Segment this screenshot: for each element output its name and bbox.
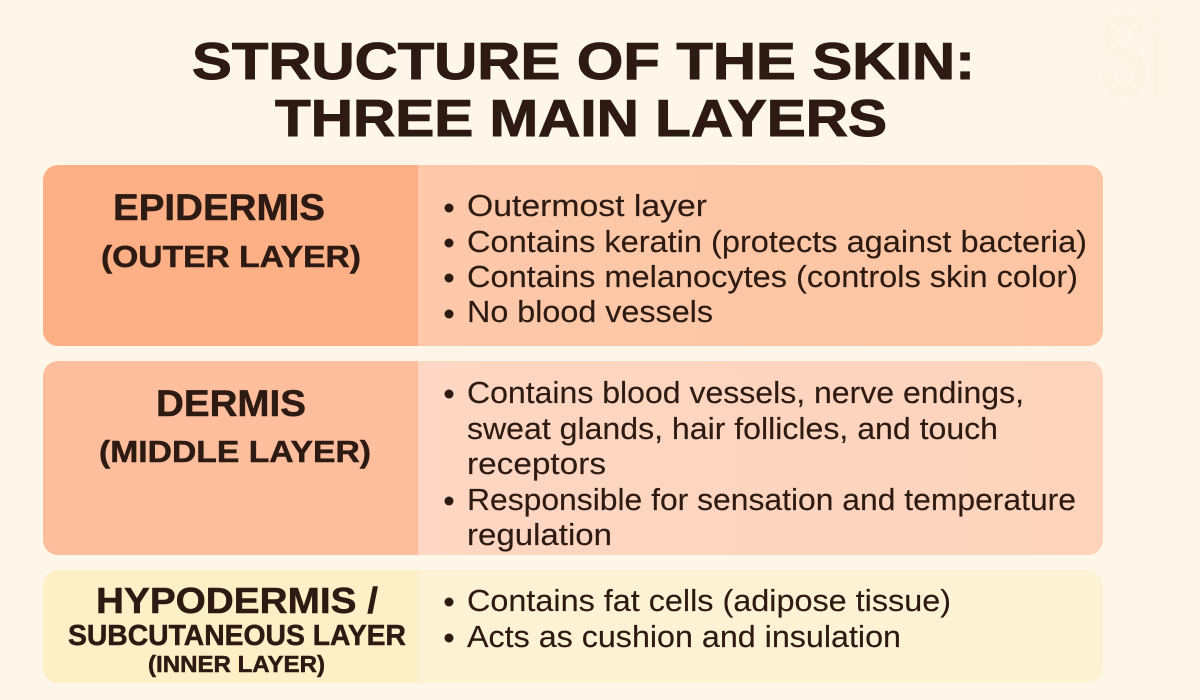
title: THREE MAIN LAYERS (275, 90, 887, 148)
hypodermis heading: SUBCUTANEOUS LAYER (68, 620, 406, 652)
epidermis heading: EPIDERMIS (113, 187, 325, 228)
hypodermis heading: HYPODERMIS / (96, 580, 378, 621)
panel: dermis (43, 361, 1103, 555)
epidermis bullet list: No blood vessels (467, 294, 713, 329)
panel: hypodermis (43, 570, 1103, 683)
dermis heading: (MIDDLE LAYER) (99, 434, 371, 469)
epidermis bullet list: Contains melanocytes (controls skin color) (467, 259, 1078, 294)
dermis bullet list: sweat glands, hair follicles, and touch (467, 411, 998, 446)
hypodermis bullet list: Contains fat cells (adipose tissue) (467, 583, 951, 618)
dermis heading: DERMIS (156, 383, 306, 424)
hypodermis bullet list (444, 583, 951, 654)
dermis bullet list: Contains blood vessels, nerve endings, (467, 375, 1024, 410)
hypodermis bullet list: Acts as cushion and insulation (467, 619, 901, 654)
dermis bullet list (444, 375, 1076, 552)
dermis bullet list: regulation (467, 517, 612, 552)
epidermis heading (101, 187, 361, 274)
epidermis bullet list: Outermost layer (467, 188, 707, 223)
title: STRUCTURE OF THE SKIN: (192, 33, 975, 91)
epidermis bullet list: Contains keratin (protects against bacteria) (467, 224, 1087, 259)
panel: epidermis (43, 165, 1103, 346)
epidermis heading: (OUTER LAYER) (101, 239, 361, 274)
dermis bullet list: receptors (467, 446, 606, 481)
title (192, 33, 975, 148)
epidermis bullet list (444, 188, 1087, 329)
hypodermis heading: (INNER LAYER) (148, 651, 325, 677)
hypodermis heading (68, 580, 406, 677)
dermis bullet list: Responsible for sensation and temperature (467, 482, 1076, 517)
dermis heading (99, 383, 371, 469)
